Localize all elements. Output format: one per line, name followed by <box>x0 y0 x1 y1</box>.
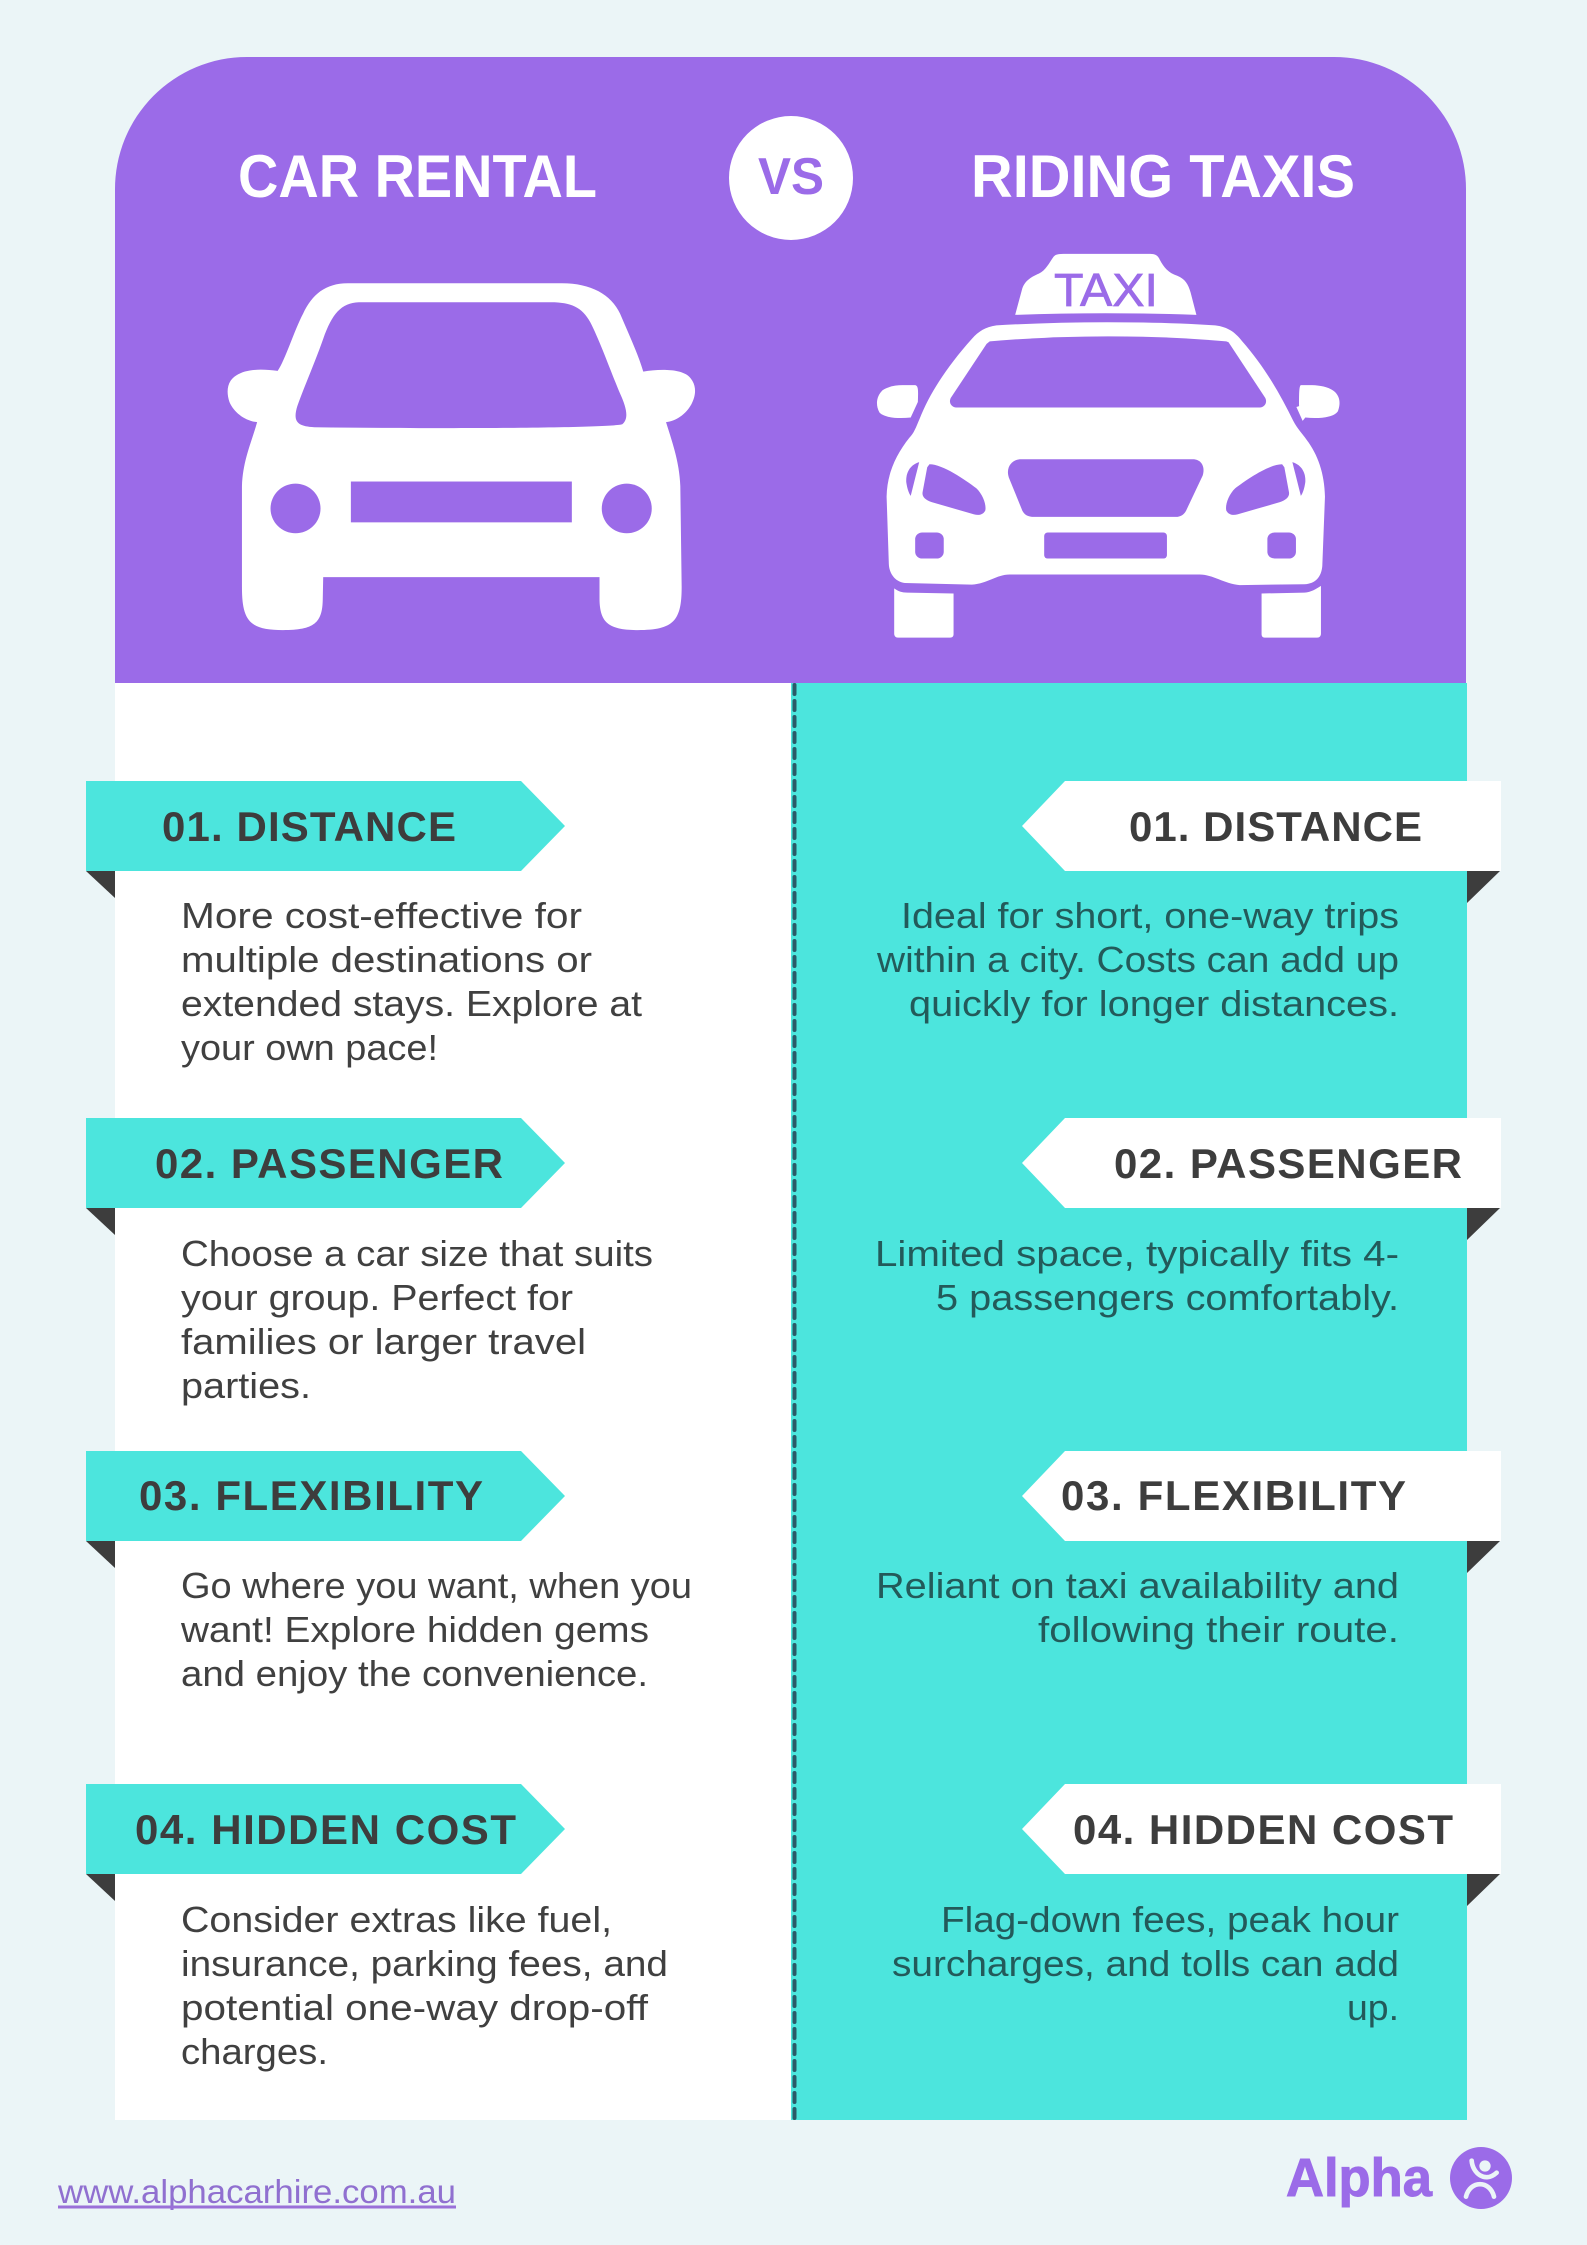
row: car rental distance: extended stays. Explore at <box>181 983 642 1024</box>
row: car rental hidden cost: 04. HIDDEN COST <box>135 1806 516 1853</box>
row: car rental passenger: your group. Perfect for <box>181 1277 573 1318</box>
row: car rental distance: 01. DISTANCE <box>162 803 456 850</box>
icon: rental car <box>228 283 695 630</box>
row: taxi passenger <box>875 1118 1501 1318</box>
row: taxi flexibility: following their route. <box>1038 1609 1399 1650</box>
row: car rental passenger: Choose a car size that suits <box>181 1233 653 1274</box>
row: car rental hidden cost: Consider extras like fuel, <box>181 1899 612 1940</box>
badge: vs <box>729 116 853 240</box>
row: taxi flexibility <box>876 1451 1501 1650</box>
row: taxi hidden cost: 04. HIDDEN COST <box>1073 1806 1453 1853</box>
row: taxi distance: 01. DISTANCE <box>1129 803 1422 850</box>
row: taxi hidden cost: up. <box>1347 1987 1399 2028</box>
row: taxi distance <box>876 781 1501 1024</box>
row: taxi flexibility: Reliant on taxi availability and <box>876 1565 1399 1606</box>
logo: alpha: Alpha <box>1286 2148 1433 2208</box>
row: car rental flexibility: 03. FLEXIBILITY <box>139 1472 483 1519</box>
row: car rental passenger: families or larger travel <box>181 1321 586 1362</box>
footer website link: www.alphacarhire.com.au <box>57 2173 456 2210</box>
row: taxi hidden cost: surcharges, and tolls can add <box>892 1943 1399 1984</box>
panel: riding taxis column <box>791 683 1501 2120</box>
panel: car rental column <box>86 683 791 2120</box>
panel: comparison header <box>115 57 1466 683</box>
row: taxi hidden cost <box>892 1784 1501 2028</box>
row: car rental distance: your own pace! <box>181 1027 438 1068</box>
row: car rental distance: More cost-effective for <box>181 895 582 936</box>
row: car rental passenger <box>86 1118 653 1406</box>
row: car rental flexibility: Go where you want, when you <box>181 1565 692 1606</box>
row: car rental distance <box>86 781 642 1068</box>
row: car rental distance: multiple destinations or <box>181 939 592 980</box>
row: car rental hidden cost <box>86 1784 668 2072</box>
row: car rental flexibility: and enjoy the convenience. <box>181 1653 648 1694</box>
heading: riding taxis: RIDING TAXIS <box>971 143 1355 210</box>
logo: alpha <box>1286 2147 1512 2209</box>
row: taxi passenger: 02. PASSENGER <box>1114 1140 1462 1187</box>
row: taxi distance: within a city. Costs can add up <box>876 939 1399 980</box>
heading: car rental: CAR RENTAL <box>238 143 597 210</box>
row: car rental flexibility <box>86 1451 692 1694</box>
row: car rental hidden cost: potential one-way drop-off <box>181 1987 649 2028</box>
badge: vs: VS <box>758 148 824 206</box>
row: car rental hidden cost: insurance, parking fees, and <box>181 1943 668 1984</box>
row: taxi flexibility: 03. FLEXIBILITY <box>1061 1472 1406 1519</box>
row: taxi passenger: 5 passengers comfortably. <box>936 1277 1399 1318</box>
row: taxi passenger: Limited space, typically fits 4- <box>875 1233 1399 1274</box>
icon: taxi <box>877 254 1340 638</box>
row: car rental passenger: parties. <box>181 1365 311 1406</box>
row: taxi hidden cost: Flag-down fees, peak hour <box>941 1899 1399 1940</box>
row: taxi distance: Ideal for short, one-way trips <box>901 895 1399 936</box>
row: car rental passenger: 02. PASSENGER <box>155 1140 503 1187</box>
taxi roof sign text: TAXI <box>1054 264 1158 316</box>
row: car rental hidden cost: charges. <box>181 2031 328 2072</box>
row: taxi distance: quickly for longer distances. <box>909 983 1399 1024</box>
row: car rental flexibility: want! Explore hidden gems <box>180 1609 649 1650</box>
